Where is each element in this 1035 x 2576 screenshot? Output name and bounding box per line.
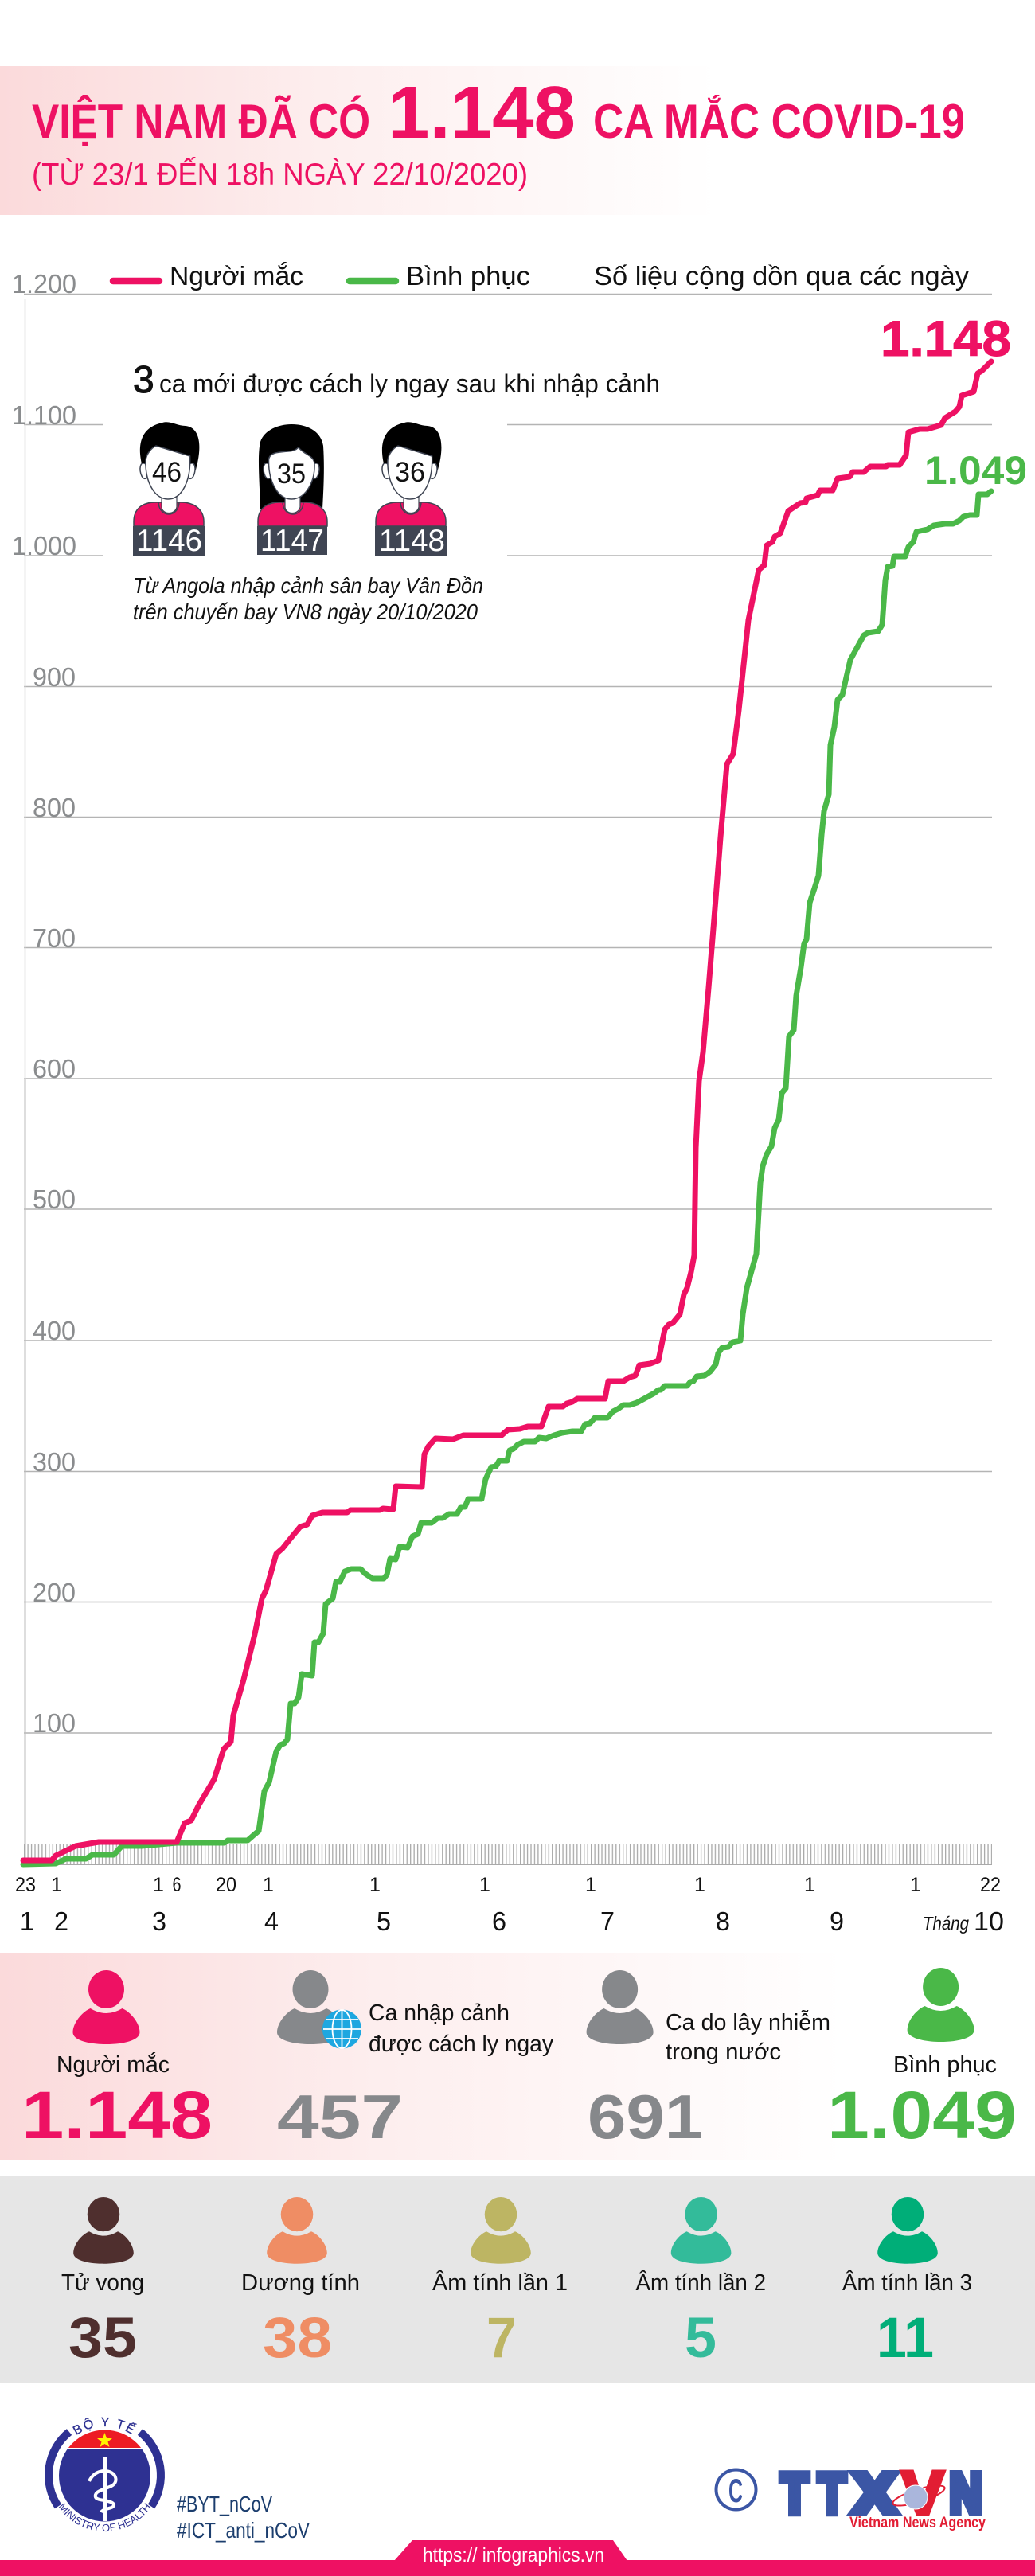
stat: negative once — [432, 2197, 568, 2370]
chart: day labels: 22 — [980, 1874, 1001, 1896]
chart: day labels: 1 — [804, 1874, 815, 1896]
stat: infected — [21, 1970, 213, 2153]
stat: imported cases — [277, 1970, 553, 2152]
stat: imported cases: Ca nhập cảnh — [369, 2000, 510, 2026]
chart: month labels: 6 — [492, 1907, 506, 1936]
chart: day labels: 6 — [172, 1874, 182, 1896]
title: headline end: CA MẮC COVID-19 — [593, 95, 965, 148]
stat: deaths — [61, 2197, 144, 2370]
chart: day labels — [15, 1874, 1001, 1896]
stat: domestic cases: 691 — [588, 2082, 703, 2152]
stat: domestic cases: Ca do lây nhiễm — [666, 2009, 830, 2035]
hashtags: #BYT_nCoV — [177, 2492, 272, 2516]
logo: Ministry of Health: MINISTRY OF HEALTH — [59, 2503, 151, 2531]
chart: day labels: 1 — [263, 1874, 274, 1896]
chart: month labels: 2 — [54, 1907, 68, 1936]
chart: month labels: 9 — [830, 1907, 844, 1936]
stat: deaths: Tử vong — [61, 2270, 144, 2296]
stat: negative twice: Âm tính lần 2 — [635, 2270, 766, 2296]
title: main headline: VIỆT NAM ĐÃ CÓ — [32, 95, 370, 148]
callout caption: trên chuyến bay VN8 ngày 20/10/2020 — [133, 599, 478, 624]
icon: male patient 1146: 1146 — [136, 524, 202, 558]
chart: recovered line — [23, 491, 991, 1864]
stat: negative twice: 5 — [685, 2307, 717, 2370]
chart: infected line — [23, 361, 991, 1860]
chart: end value recovered: 1.049 — [924, 448, 1027, 493]
callout heading: 3 — [133, 359, 154, 401]
chart: month labels: 8 — [716, 1907, 730, 1936]
icon: female patient 1147: 35 — [277, 459, 306, 490]
stat: positive — [241, 2197, 360, 2370]
stat: recovered: 1.049 — [827, 2078, 1017, 2153]
chart: end value infected: 1.148 — [881, 311, 1011, 367]
chart: month caption: Tháng — [923, 1913, 969, 1934]
panel: status breakdown — [0, 2176, 1035, 2383]
stat: negative twice — [635, 2197, 766, 2370]
chart: month labels: 7 — [600, 1907, 615, 1936]
stat: negative three times: 11 — [877, 2307, 934, 2370]
chart: daily tick band — [24, 1844, 992, 1864]
chart: month labels: 5 — [377, 1907, 391, 1936]
chart: month labels: 1 — [20, 1907, 34, 1936]
stat: imported cases: 457 — [277, 2082, 403, 2152]
legend: Số liệu cộng dồn qua các ngày — [594, 261, 970, 291]
chart: day labels: 1 — [479, 1874, 490, 1896]
stat: recovered — [827, 1968, 1017, 2153]
icon: male patient 1148 — [375, 422, 447, 558]
chart: day labels: 1 — [585, 1874, 596, 1896]
callout: new cases — [133, 359, 660, 624]
stat: negative once: Âm tính lần 1 — [432, 2270, 568, 2296]
logo: TTXVN: Vietnam News Agency — [849, 2515, 986, 2531]
icon: male patient 1148: 1148 — [379, 524, 445, 558]
chart: y axis labels — [12, 269, 76, 1738]
stat: recovered: Bình phục — [893, 2052, 997, 2078]
legend: Bình phục — [406, 261, 530, 291]
chart: y axis labels: 500 — [33, 1185, 76, 1214]
chart: month labels: 10 — [974, 1907, 1004, 1936]
title band — [0, 66, 965, 215]
chart: day labels: 1 — [369, 1874, 381, 1896]
callout heading: ca mới được cách ly ngay sau khi nhập cảnh — [159, 369, 660, 398]
stat: infected: Người mắc — [57, 2051, 170, 2078]
stat: domestic cases — [587, 1970, 830, 2152]
chart: y axis labels: 300 — [33, 1447, 76, 1477]
chart: y axis labels: 800 — [33, 793, 76, 822]
icon: globe — [322, 2009, 361, 2049]
logo: Ministry of Health — [45, 2417, 165, 2531]
chart: y axis labels: 100 — [33, 1708, 76, 1738]
footer bar — [0, 2540, 1035, 2576]
stat: negative once: 7 — [486, 2307, 517, 2370]
chart: month labels: 4 — [264, 1907, 279, 1936]
chart: day labels: 1 — [694, 1874, 705, 1896]
chart: y axis labels: 1.000 — [12, 531, 76, 560]
logo: TTXVN: N — [950, 2462, 982, 2524]
logo: TTXVN: V — [902, 2460, 943, 2527]
logo: Ministry of Health: BỘ Y TẾ — [72, 2417, 137, 2435]
chart: day labels: 1 — [153, 1874, 164, 1896]
logo: TTXVN: X — [853, 2462, 896, 2524]
legend: Người mắc — [170, 261, 303, 291]
stat: negative three times: Âm tính lần 3 — [842, 2270, 972, 2296]
chart: grid lines — [24, 295, 992, 1733]
chart: y axis labels: 700 — [33, 923, 76, 953]
callout caption — [133, 573, 483, 624]
stat: positive: 38 — [263, 2307, 332, 2370]
footer bar: https:// infographics.vn — [423, 2544, 604, 2566]
chart: y axis labels: 200 — [33, 1578, 76, 1607]
hashtags: #ICT_anti_nCoV — [177, 2518, 310, 2543]
icon: female patient 1147: 1147 — [260, 524, 324, 558]
icon: copyright — [717, 2469, 756, 2509]
callout heading — [133, 359, 660, 401]
stat: negative three times — [842, 2197, 972, 2370]
icon: female patient 1147 — [257, 424, 327, 558]
logo: TTXVN — [781, 2460, 986, 2531]
logo: TTXVN: T — [781, 2462, 808, 2524]
panel: totals — [0, 1953, 1017, 2160]
icon: male patient 1146: 46 — [152, 457, 182, 488]
legend — [113, 261, 970, 291]
chart: y axis labels: 1.100 — [12, 400, 76, 430]
subtitle: (TỪ 23/1 ĐẾN 18h NGÀY 22/10/2020) — [32, 157, 528, 192]
icon: copyright: C — [728, 2472, 743, 2509]
chart: month labels: 3 — [152, 1907, 166, 1936]
logo: TTXVN: T — [818, 2462, 846, 2524]
stat: infected: 1.148 — [21, 2078, 213, 2153]
callout caption: Từ Angola nhập cảnh sân bay Vân Đồn — [133, 573, 483, 598]
chart: month labels — [20, 1907, 1004, 1936]
title: headline number: 1.148 — [388, 71, 576, 154]
stat: imported cases: được cách ly ngay — [369, 2032, 553, 2057]
chart: day labels: 1 — [51, 1874, 62, 1896]
chart: day labels: 23 — [15, 1874, 36, 1896]
chart: day labels: 1 — [910, 1874, 921, 1896]
chart: y axis labels: 400 — [33, 1316, 76, 1345]
icon: male patient 1148: 36 — [395, 457, 425, 488]
chart: vertical axis — [24, 299, 25, 1864]
chart: y axis labels: 1.200 — [12, 269, 76, 299]
hashtags — [177, 2492, 310, 2543]
stat: positive: Dương tính — [241, 2270, 360, 2296]
chart: y axis labels: 600 — [33, 1054, 76, 1083]
line chart — [12, 269, 1027, 1936]
stat: deaths: 35 — [68, 2307, 137, 2370]
stat: domestic cases: trong nước — [666, 2039, 781, 2065]
icon: male patient 1146 — [133, 422, 205, 558]
chart: y axis labels: 900 — [33, 662, 76, 692]
chart: day labels: 20 — [216, 1874, 236, 1896]
